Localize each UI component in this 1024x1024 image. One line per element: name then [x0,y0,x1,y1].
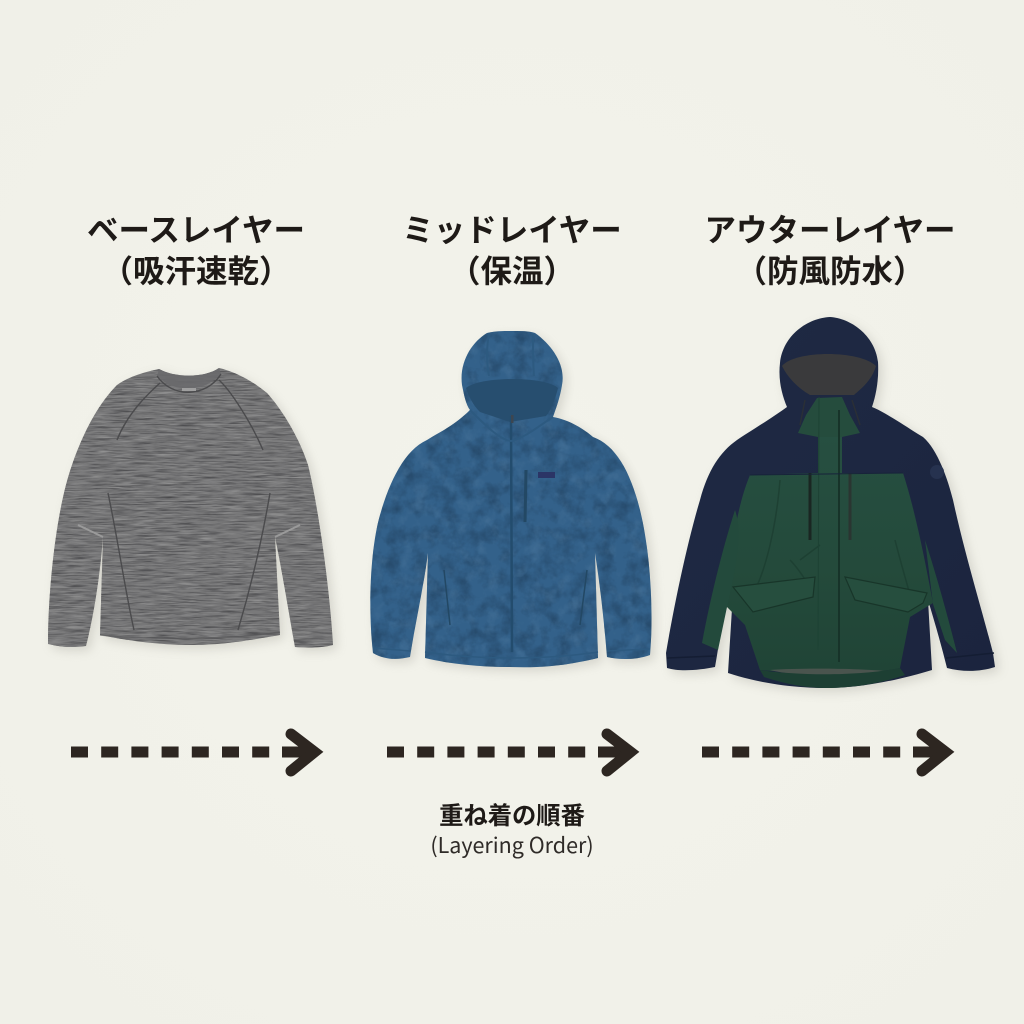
fleece zipper and seams [373,333,650,658]
jacket green body panels [702,397,957,674]
arrow 3 [702,734,946,771]
jacket hood opening [782,354,876,395]
heading: base layer: （吸汗速乾） [101,246,291,292]
illustration: navy and green outer layer jacket [666,317,995,688]
heading: mid layer [402,205,622,292]
caption: layering order [430,796,594,860]
jacket zips and details [667,397,994,662]
jacket pocket flaps [733,577,927,612]
jacket lower hem lining [770,669,895,676]
heading: outer layer [704,205,956,292]
heading: base layer [87,205,305,292]
arrow 1 [71,734,314,771]
heading: outer layer: （防風防水） [735,246,925,292]
caption: layering order: (Layering Order) [430,829,594,860]
fleece hood opening [466,379,558,422]
illustration: blue fleece mid layer hoodie [370,331,652,667]
caption: layering order: 重ね着の順番 [439,796,585,831]
arrow 2 [387,734,630,771]
jacket navy shell [666,317,995,688]
heading: outer layer: アウターレイヤー [704,205,956,251]
illustration: grey base layer long-sleeve shirt [48,368,333,648]
heading: base layer: ベースレイヤー [87,205,305,251]
heading: mid layer: ミッドレイヤー [402,205,622,251]
heading: mid layer: （保温） [449,246,575,292]
shirt collar and seams [78,368,300,638]
